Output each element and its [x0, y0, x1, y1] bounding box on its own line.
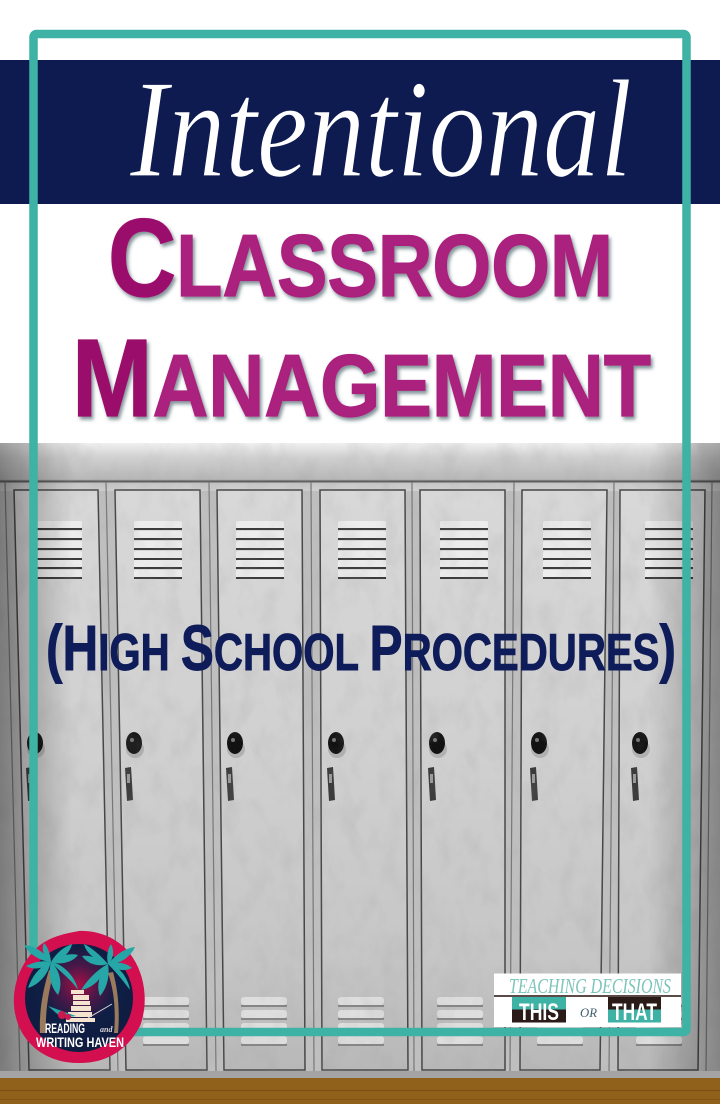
photo: school lockers: [0, 443, 720, 1079]
badge text: [36, 1020, 124, 1050]
badge text: WRITING HAVEN: [36, 1034, 124, 1050]
icon: palm trees: [24, 943, 135, 1033]
badge ring: [14, 931, 145, 1063]
badge flowers: [48, 1004, 112, 1020]
logo heading: Teaching Decisions: TEACHING DECISIONS: [509, 974, 671, 998]
icon: stack of books: [66, 990, 95, 1022]
badge text: READING: [45, 1020, 85, 1036]
logo block: This: THIS: [519, 999, 559, 1026]
heading: Classroom: CLASSROOM: [108, 197, 613, 320]
logo block: That: THAT: [612, 999, 657, 1026]
navy title band: [0, 60, 720, 204]
subtitle: High School Procedures: (HIGH SCHOOL PROCEDURES): [46, 612, 676, 684]
badge text: and: [100, 1025, 113, 1034]
badge: Reading and Writing Haven: [14, 931, 145, 1063]
logo: Teaching Decisions This or That: [494, 974, 681, 1027]
wooden floor strip: [0, 1078, 720, 1104]
logo word: or: OR: [580, 1005, 597, 1020]
heading: Management: MANAGEMENT: [72, 317, 651, 440]
logo block: That: [608, 997, 661, 1026]
